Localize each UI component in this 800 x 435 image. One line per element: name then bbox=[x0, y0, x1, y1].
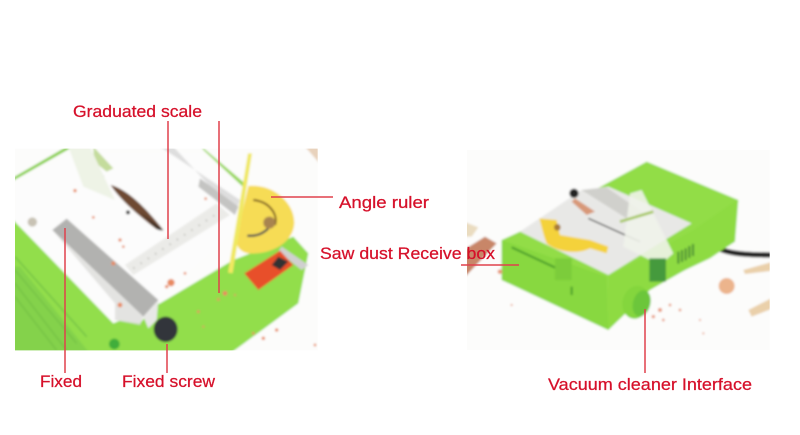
label: Saw dust Receive box: Saw dust Receive box bbox=[320, 244, 496, 263]
green body bbox=[12, 218, 308, 354]
label: Vacuum cleaner Interface: Vacuum cleaner Interface bbox=[548, 375, 752, 394]
vacuum port bbox=[624, 287, 642, 320]
sticker bbox=[244, 251, 293, 290]
label: Fixed screw: Fixed screw bbox=[122, 372, 216, 391]
angle ruler bbox=[236, 186, 294, 253]
label: Graduated scale bbox=[73, 102, 202, 239]
label: Fixed: Fixed bbox=[40, 372, 82, 391]
pointer: saw dust line bbox=[218, 121, 220, 293]
cable bbox=[713, 245, 773, 255]
fence bbox=[52, 219, 158, 317]
slot and vents bbox=[512, 247, 557, 268]
steel top bbox=[520, 187, 692, 275]
blade guard bbox=[623, 190, 673, 265]
wood pieces bbox=[464, 237, 497, 278]
label: Fixed screw bbox=[122, 344, 216, 391]
table top bbox=[120, 312, 145, 324]
blade bbox=[111, 185, 163, 230]
knob bbox=[154, 317, 178, 342]
sawdust bbox=[498, 269, 704, 334]
label: Angle ruler: Angle ruler bbox=[339, 193, 429, 212]
photo: complete saw machine bbox=[467, 160, 770, 336]
green body bbox=[502, 162, 738, 330]
label: Graduated scale: Graduated scale bbox=[73, 102, 202, 121]
photo: saw table close-up bbox=[12, 145, 321, 354]
corner and sawdust bbox=[306, 148, 318, 162]
protractor bbox=[539, 218, 608, 253]
scale bbox=[125, 203, 230, 275]
